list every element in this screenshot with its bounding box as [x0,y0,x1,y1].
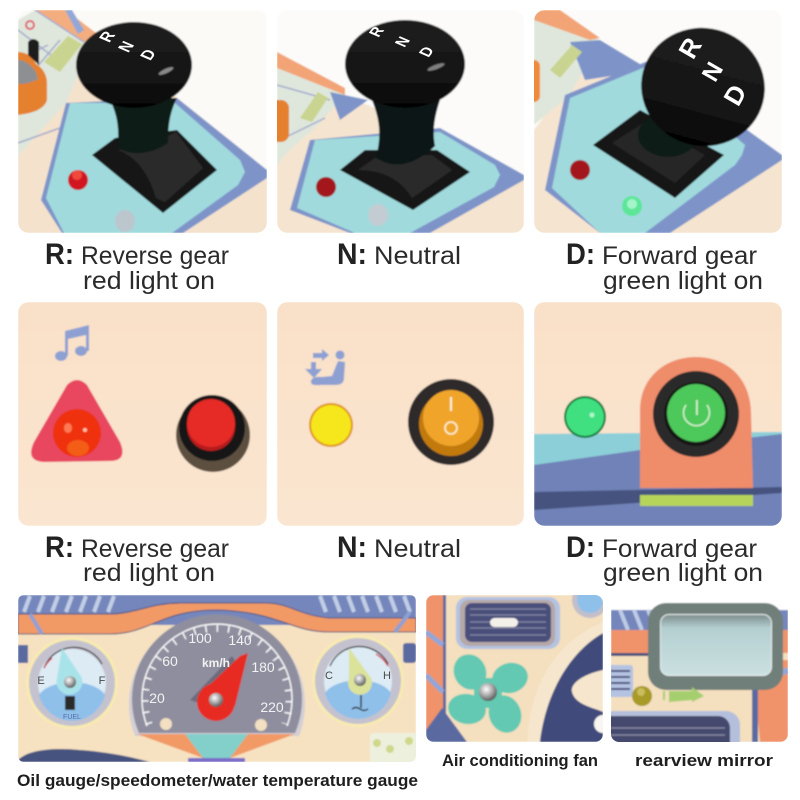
knob head [76,22,192,108]
rocker switch [408,379,494,465]
olive LED [632,686,652,706]
speedometer numbers: 180 [251,659,275,675]
shifter neck [372,100,440,164]
steering wheel arc [527,622,603,742]
caption: N neutral row two [337,531,461,564]
panel: N gear shifter photo [265,10,524,233]
red LED [53,409,101,457]
caption: R reverse gear row two: Reverse gear [81,535,229,563]
caption: D forward gear row two: green light on [603,559,763,587]
speedometer dome [128,655,306,736]
caption: gauges: Oil gauge/speedometer/water temperature gauge [17,771,418,790]
icon: seat airflow [305,349,345,385]
speedometer numbers: km/h [202,656,230,670]
shifter base [340,150,470,210]
caption: rearview mirror: rearview mirror [635,751,773,770]
shifter base [92,130,217,213]
caption: N neutral row two: N: [337,531,367,564]
gauge letters: E [37,675,45,687]
panel: air conditioning fan [426,582,612,742]
side vent [605,665,633,697]
red triangle plate [31,380,122,462]
panel: green light and power switch [534,302,782,526]
shifter base [593,110,724,198]
panel: D gear shifter photo: R [672,32,708,64]
panel: N gear shifter photo: D [416,44,438,60]
green LED on [622,196,642,216]
gauge letters: C [325,670,333,682]
caption: air conditioning fan: Air conditioning fan [442,751,598,770]
icon: music note [55,325,89,361]
speedometer numbers: 220 [260,699,284,715]
fan blades [446,649,531,737]
speedometer pegs [160,718,172,730]
speedometer numbers: 20 [149,690,165,706]
speedometer needle [197,653,248,721]
panel: D gear shifter photo [522,10,782,233]
gauge letters [37,670,391,721]
gauge corner [572,582,608,618]
speedometer numbers: 140 [228,632,252,648]
panel: R gear shifter photo [18,10,267,233]
caption: R reverse gear: Reverse gear [81,242,229,270]
lower vent [600,711,740,761]
knob head [640,26,766,148]
small side vents [18,645,28,663]
water temperature gauge [312,635,404,727]
needle shadow [190,656,240,712]
white LED off [368,204,388,226]
caption: D forward gear: green light on [603,267,763,295]
fuel gauge [26,637,118,729]
panel: dashboard gauges [18,595,420,765]
panel: N gear shifter photo: N [392,34,414,50]
lower trapezoids [137,734,295,758]
caption: D forward gear [566,238,763,295]
mirror frame [648,603,783,690]
top vent band [18,595,416,625]
caption: N neutral: Neutral [374,242,461,270]
panel: R gear shifter photo: R [96,29,120,45]
white LED off [115,210,135,232]
panel: R gear shifter photo: N [115,39,139,55]
caption: R reverse gear row two: red light on [83,559,215,587]
shifter neck [638,117,694,157]
caption: R reverse gear row two: R: [45,531,74,564]
caption: D forward gear row two [566,531,763,587]
green LED [564,396,606,438]
blue plate [41,98,267,233]
fan hub [479,683,497,701]
panel: red music light and button [18,302,267,526]
caption: R reverse gear row two [45,531,229,587]
panel: rearview mirror [600,595,788,761]
speedometer numbers: 100 [188,630,212,646]
push button [175,408,251,473]
map area [18,10,86,155]
red LED off [570,160,590,180]
power switch [653,371,739,457]
shifter neck [110,98,177,153]
green arrow [663,687,704,702]
speedometer numbers [149,630,284,715]
gauge letters: H [383,670,391,682]
caption: N neutral [337,238,461,271]
panel: D gear shifter photo: N [697,58,729,86]
caption: D forward gear row two: D: [566,531,595,564]
panel: N gear shifter photo: R [366,24,388,40]
caption: D forward gear: Forward gear [602,242,757,270]
caption: R reverse gear [45,238,229,295]
panel: yellow light and rocker switch [277,302,524,526]
caption: R reverse gear: red light on [83,267,215,295]
red LED off [316,177,336,197]
speedometer numbers: 60 [162,653,178,669]
caption: N neutral: N: [337,238,367,271]
lime bar [640,495,753,506]
caption: R reverse gear: R: [45,238,74,271]
orange arch plate [640,357,753,488]
knob head [345,20,465,108]
caption: D forward gear row two: Forward gear [602,535,757,563]
caption: N neutral row two: Neutral [374,535,461,563]
orange toggle [18,52,47,115]
red LED on [68,170,88,190]
panel: R gear shifter photo: D [137,47,161,63]
gauge letters: FUEL [63,714,81,721]
air vent [456,597,560,649]
yellow LED [309,403,353,447]
panel: D gear shifter photo: D [717,79,753,111]
gauge letters: F [99,675,106,687]
caption: D forward gear: D: [566,238,595,271]
